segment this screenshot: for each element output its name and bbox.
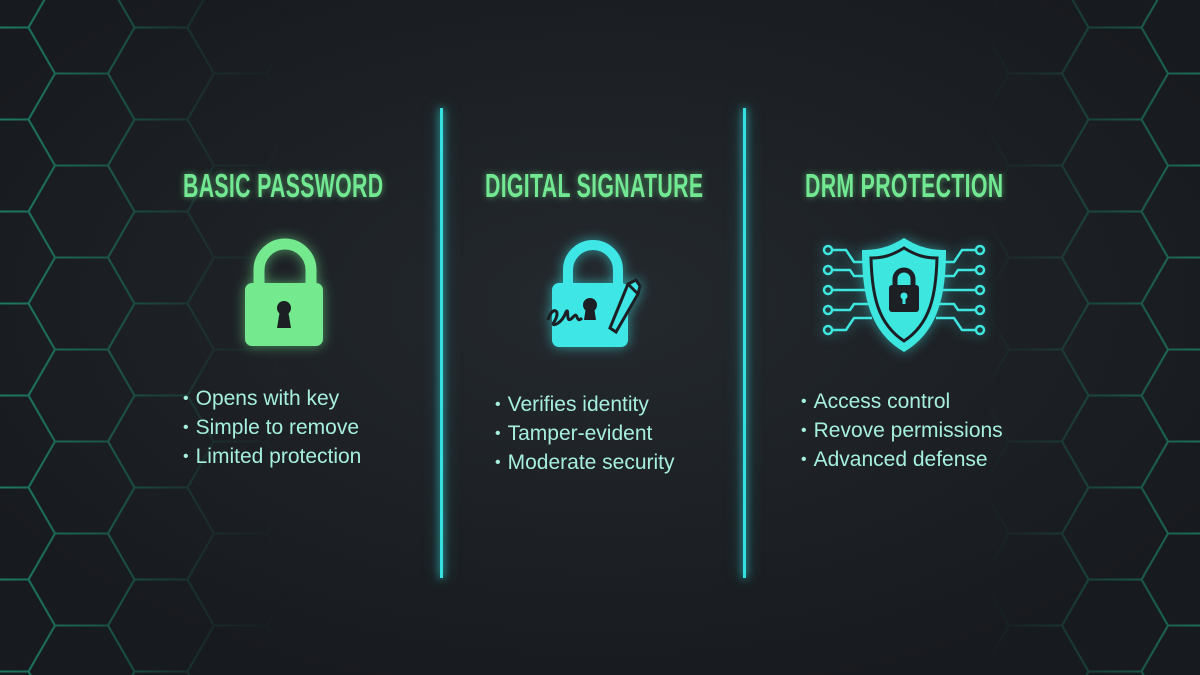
icon: DRM shield with circuits xyxy=(819,232,989,357)
bullets: drm protection xyxy=(802,390,1003,471)
bullets: drm protection: Access control xyxy=(814,390,950,413)
bullets: basic password: Opens with key xyxy=(196,387,339,410)
bullets: digital signature: Tamper-evident xyxy=(508,422,652,445)
heading: drm protection: DRM PROTECTION xyxy=(805,167,1003,204)
bullets: basic password xyxy=(184,387,361,468)
bullets: basic password: Limited protection xyxy=(196,445,361,468)
heading: basic password: BASIC PASSWORD xyxy=(183,167,383,204)
bullets: digital signature: Verifies identity xyxy=(508,393,649,416)
bullets: digital signature xyxy=(496,393,675,474)
heading: digital signature: DIGITAL SIGNATURE xyxy=(485,167,703,204)
divider left xyxy=(440,108,443,578)
icon: green padlock xyxy=(236,230,332,354)
bullets: drm protection: Advanced defense xyxy=(814,448,988,471)
divider right xyxy=(743,108,746,578)
bullets: drm protection: Revove permissions xyxy=(814,419,1003,442)
icon: cyan signature padlock xyxy=(542,232,648,356)
bullets: basic password: Simple to remove xyxy=(196,416,359,439)
bullets: digital signature: Moderate security xyxy=(508,451,675,474)
